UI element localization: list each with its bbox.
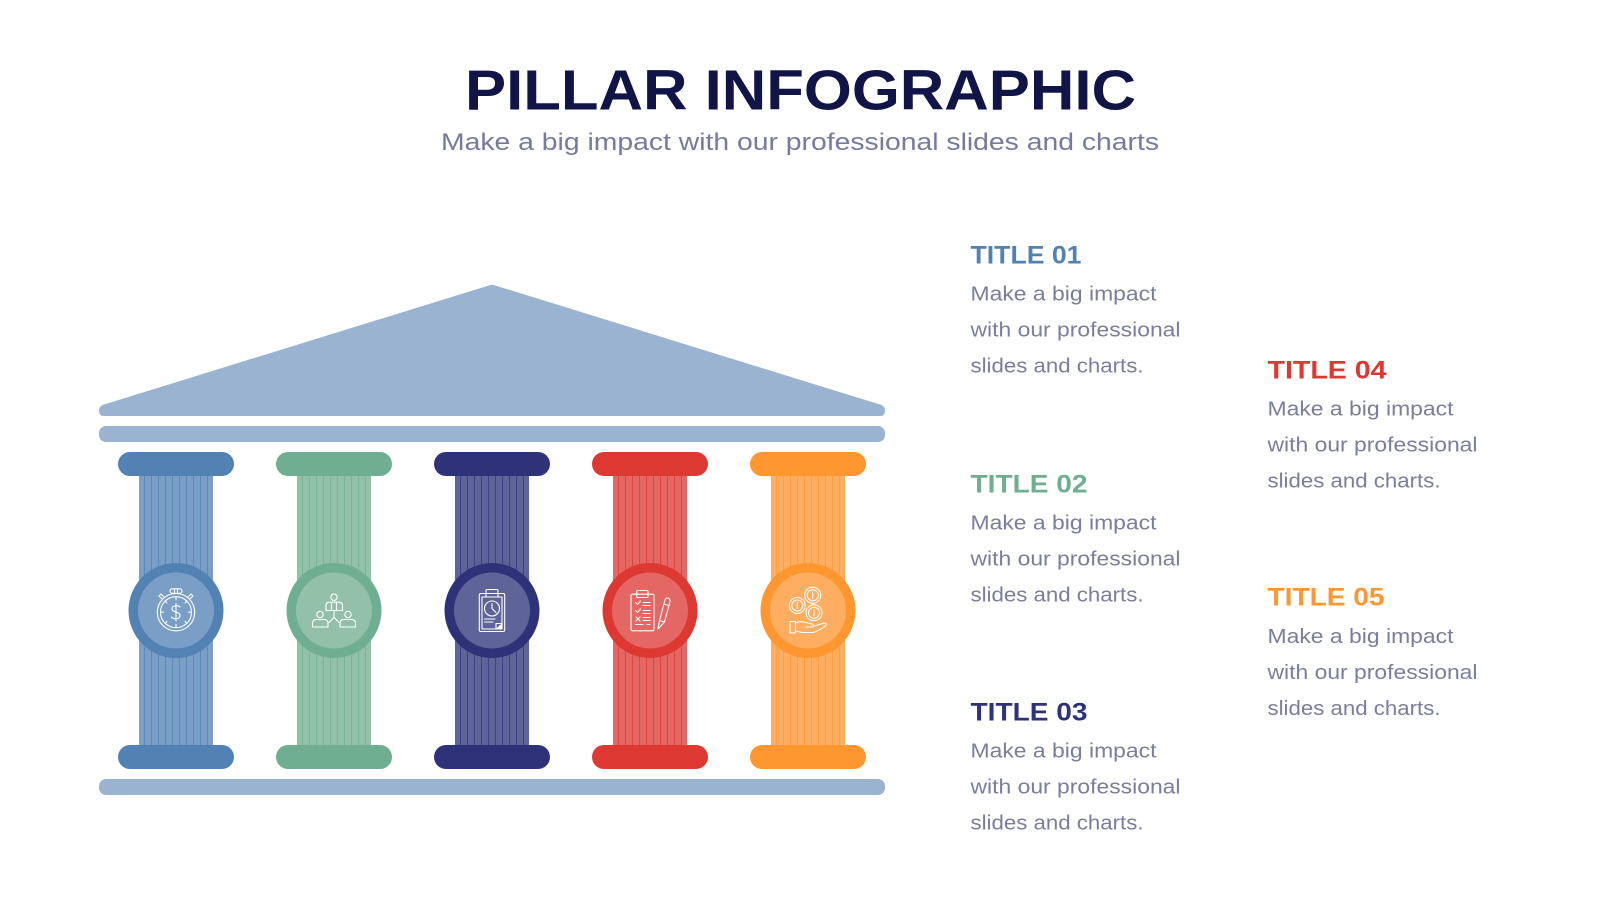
text block: title 02: with our professional xyxy=(969,548,1180,571)
text block: title 05: Make a big impact xyxy=(1268,625,1454,648)
text block: title 04: slides and charts. xyxy=(1268,470,1440,493)
temple roof xyxy=(99,285,885,416)
text block: title 02 xyxy=(969,470,1180,607)
text block: title 04: with our professional xyxy=(1266,434,1478,457)
text block: title 03: with our professional xyxy=(969,776,1180,799)
title: PILLAR INFOGRAPHIC xyxy=(465,58,1136,122)
icon: checklist and pen xyxy=(631,590,670,631)
icon: team hierarchy xyxy=(312,594,356,627)
text block: title 05: TITLE 05 xyxy=(1268,584,1385,612)
text block: title 01: Make a big impact xyxy=(970,283,1157,306)
text block: title 05 xyxy=(1266,584,1478,720)
text block: title 02: TITLE 02 xyxy=(970,470,1088,498)
roof beam xyxy=(99,426,885,442)
pillar 5: orange xyxy=(750,452,866,769)
text block: title 01: with our professional xyxy=(969,319,1180,342)
text block: title 05: slides and charts. xyxy=(1268,697,1440,720)
text block: title 04: Make a big impact xyxy=(1268,398,1454,421)
icon: coins and hand xyxy=(789,587,826,633)
text block: title 03: TITLE 03 xyxy=(970,698,1088,726)
text block: title 01 xyxy=(969,241,1180,378)
pillar 1: blue xyxy=(118,452,234,769)
text block: title 05: with our professional xyxy=(1266,661,1478,684)
subtitle: Make a big impact with our professional slides and charts xyxy=(441,129,1159,156)
pillar 3: navy xyxy=(434,452,550,769)
icon: report clipboard xyxy=(479,590,505,632)
icon: stopwatch xyxy=(157,589,195,631)
text block: title 03: slides and charts. xyxy=(970,812,1144,835)
text block: title 03: Make a big impact xyxy=(970,740,1157,763)
text block: title 02: slides and charts. xyxy=(970,584,1144,607)
text block: title 01: TITLE 01 xyxy=(970,241,1082,269)
floor beam xyxy=(99,779,885,795)
text block: title 03 xyxy=(969,698,1180,835)
pillar 2: green xyxy=(276,452,392,769)
text block: title 01: slides and charts. xyxy=(970,355,1144,378)
pillar 4: red xyxy=(592,452,708,769)
text block: title 04: TITLE 04 xyxy=(1268,356,1387,384)
text block: title 04 xyxy=(1266,356,1478,493)
text block: title 02: Make a big impact xyxy=(970,512,1157,535)
